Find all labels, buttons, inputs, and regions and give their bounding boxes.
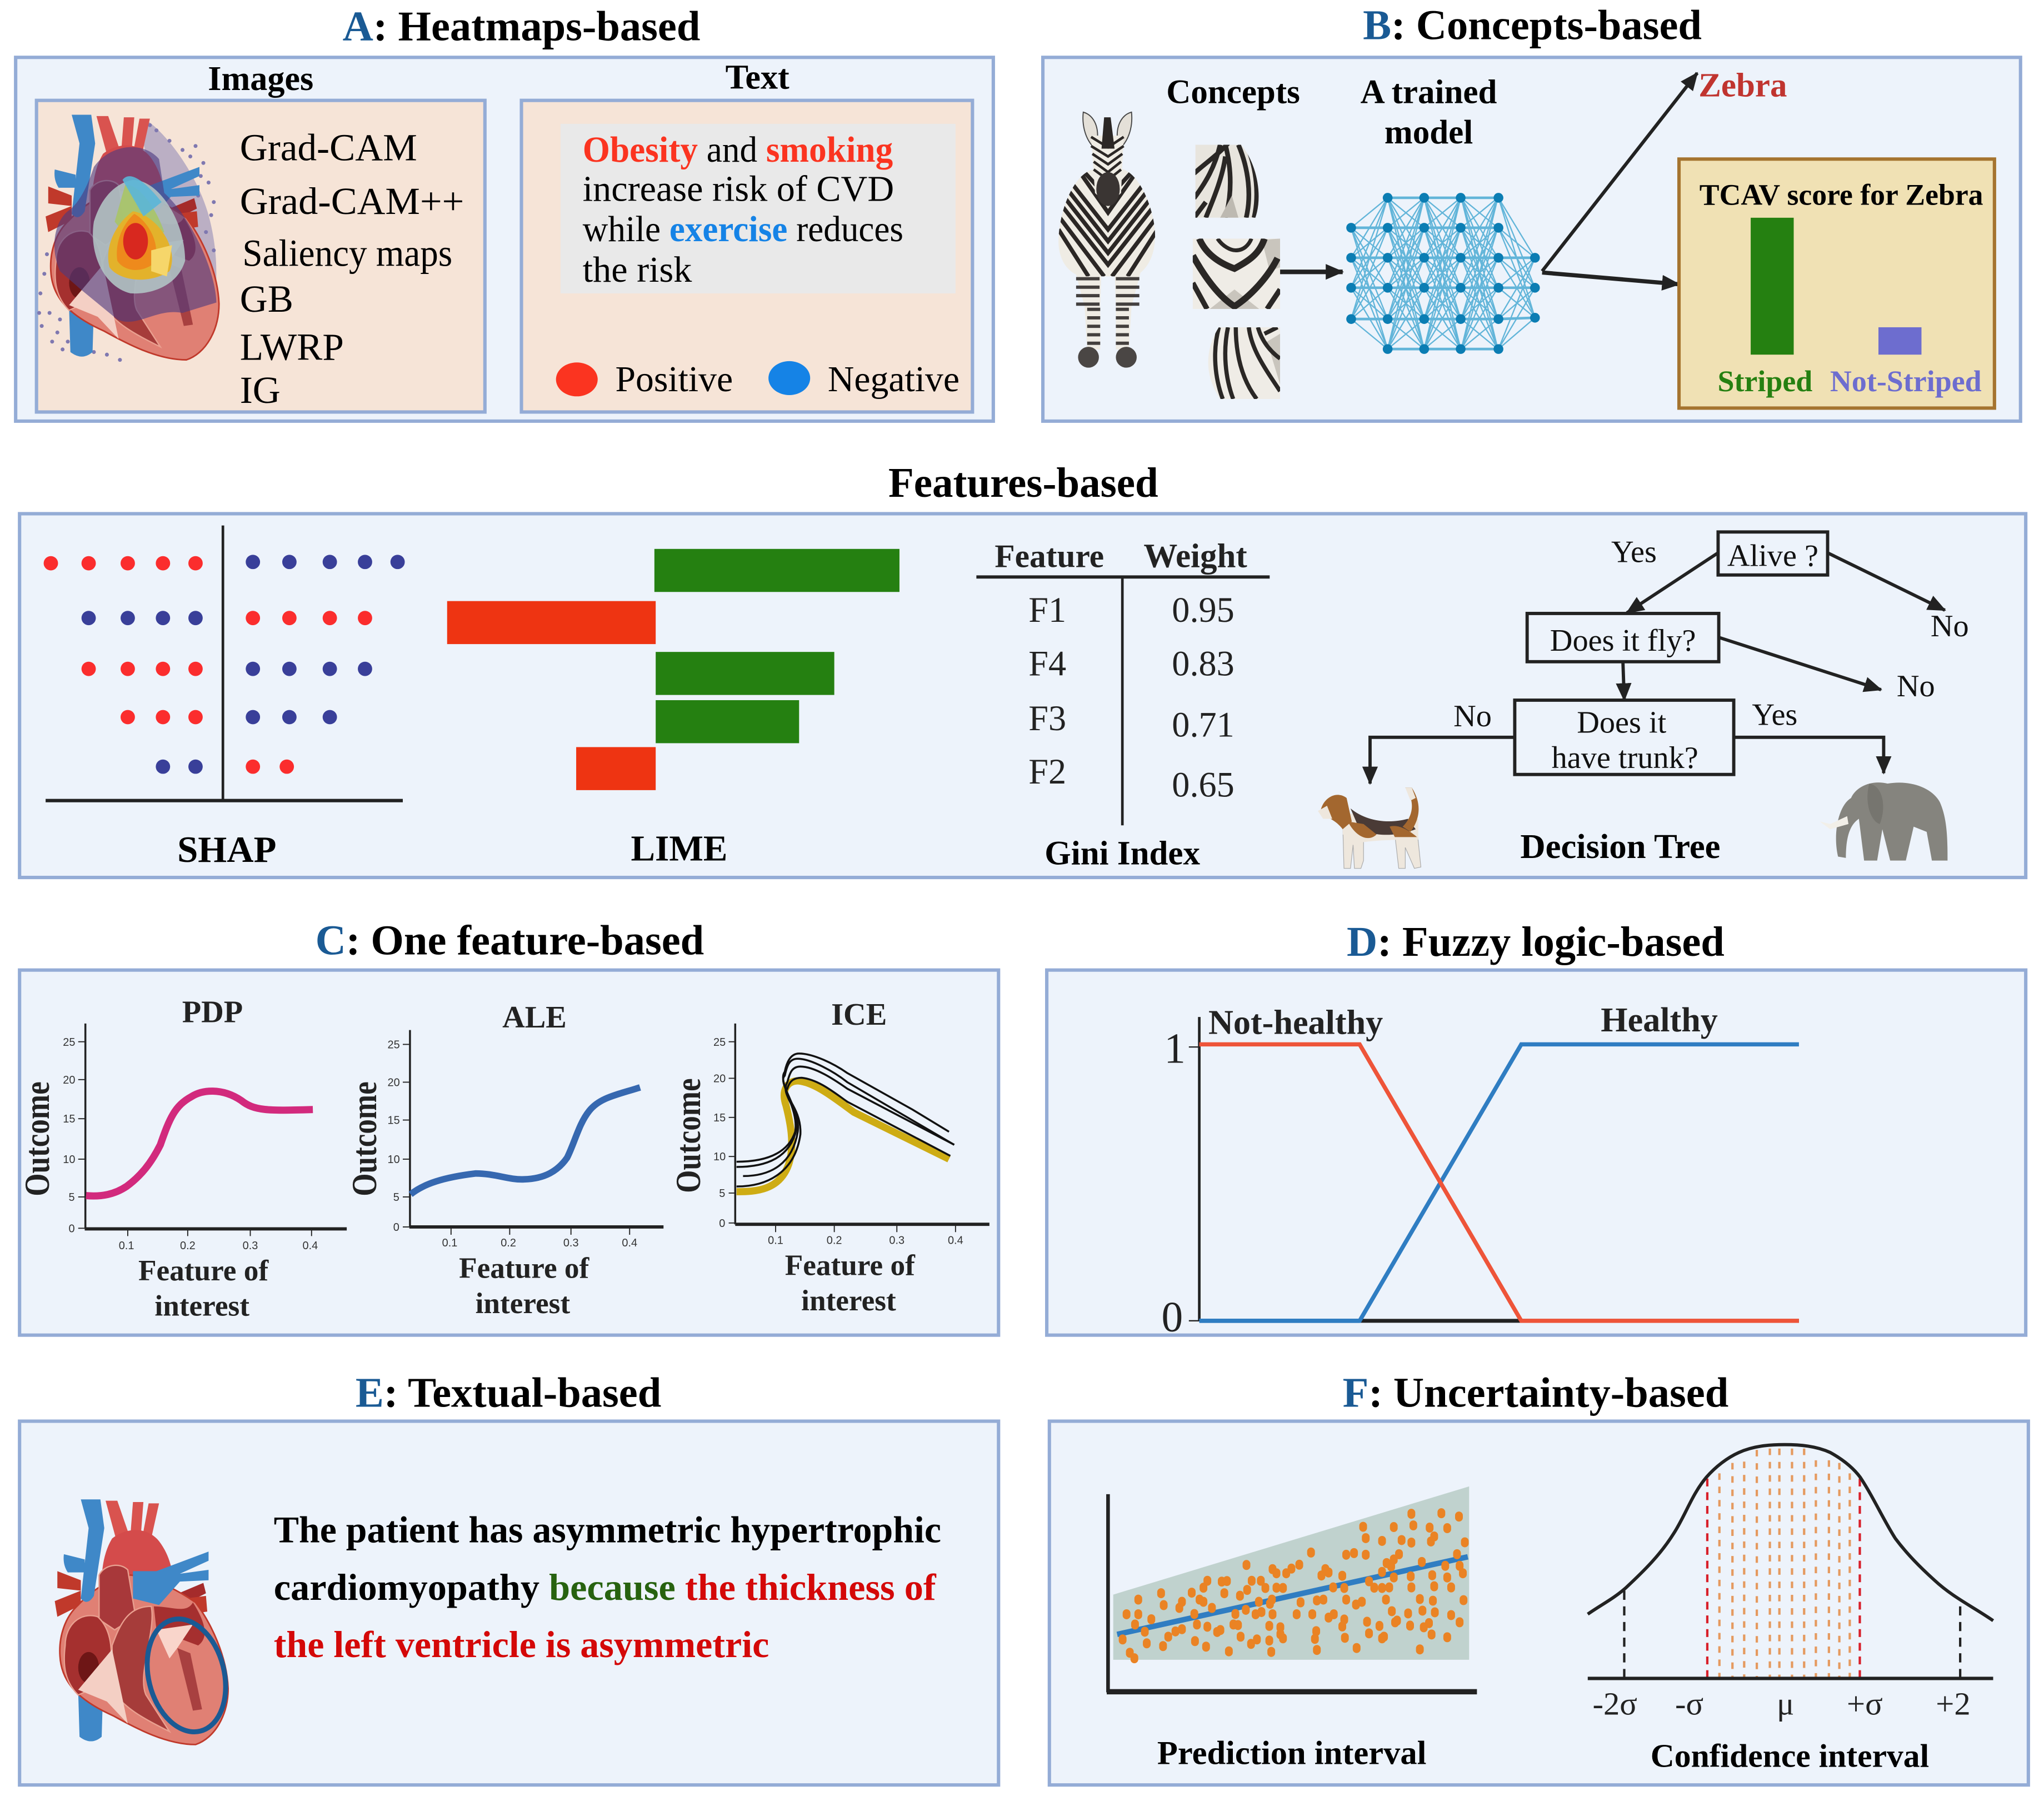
legend xyxy=(556,359,959,400)
chart: ALE: Feature of xyxy=(459,1251,590,1284)
node: Does it have trunk: have trunk? xyxy=(1552,741,1698,775)
highlighted text box: the risk xyxy=(583,250,692,290)
heading: Images: Images xyxy=(208,60,313,98)
panel: C one feature xyxy=(18,970,998,1335)
node: Alive: Alive ? xyxy=(1727,538,1818,573)
chart: ICE: ICE xyxy=(831,997,887,1032)
heading: Concepts: Concepts xyxy=(1166,73,1300,111)
method list: Saliency maps xyxy=(242,232,452,275)
confidence interval chart: +2 xyxy=(1936,1685,1971,1722)
chart: ALE: 15 xyxy=(387,1115,400,1127)
prediction interval chart xyxy=(1107,1486,1477,1772)
bar: Not-Striped xyxy=(1878,327,1921,355)
branch labels: No xyxy=(1897,669,1935,704)
TCAV score chart: TCAV score for Zebra xyxy=(1700,178,1983,211)
Gini index table: F1 xyxy=(1028,590,1066,630)
node: Does it fly: Does it fly? xyxy=(1550,623,1696,658)
chart: PDP xyxy=(18,995,347,1322)
fuzzy membership chart: Healthy xyxy=(1601,1001,1718,1039)
icon: heart heatmap xyxy=(39,114,219,360)
confidence interval chart: -2σ xyxy=(1592,1685,1637,1722)
title: E Textual-based: E: Textual-based xyxy=(356,1369,661,1416)
branch labels xyxy=(1453,535,1969,734)
legend: Positive xyxy=(615,359,733,400)
panel: F uncertainty xyxy=(1050,1421,2028,1785)
icon: heart with ring xyxy=(55,1499,237,1744)
label: SHAP: SHAP xyxy=(177,829,276,870)
chart: PDP: Outcome xyxy=(18,1081,57,1196)
Gini index table: 0.95 xyxy=(1172,590,1235,630)
Gini index table: F3 xyxy=(1028,699,1066,738)
arrow: model to Zebra xyxy=(1542,73,1697,271)
explanation text xyxy=(274,1509,941,1665)
chart: ALE: 0.1 xyxy=(442,1237,457,1249)
label: Striped: Striped xyxy=(1717,365,1812,398)
chart: PDP: 5 xyxy=(68,1191,75,1204)
chart: ALE: 0.4 xyxy=(622,1237,637,1249)
Gini index table: 0.65 xyxy=(1172,765,1235,805)
chart: ICE: 0.4 xyxy=(948,1234,963,1246)
title: D Fuzzy logic-based: D: Fuzzy logic-based xyxy=(1347,918,1725,965)
fuzzy membership chart xyxy=(1162,1001,1799,1341)
chart: ALE: 0.2 xyxy=(501,1237,516,1249)
label: Not-Striped: Not-Striped xyxy=(1830,365,1982,398)
LIME chart xyxy=(447,549,899,869)
chart: ICE: interest xyxy=(801,1284,896,1317)
chart: ICE: 10 xyxy=(713,1151,726,1163)
Gini index table: Feature xyxy=(994,538,1104,575)
branch labels: No xyxy=(1931,609,1969,643)
bar: Striped xyxy=(1751,218,1794,355)
panel: A heatmaps xyxy=(16,57,993,421)
method list: IG xyxy=(240,368,281,411)
title: C One feature-based: C: One feature-based xyxy=(316,917,704,964)
chart: PDP: 0.1 xyxy=(119,1240,134,1252)
chart: ICE: Feature of xyxy=(785,1249,916,1282)
arrows xyxy=(1370,553,1945,784)
title: B Concepts-based: B: Concepts-based xyxy=(1363,1,1702,48)
TCAV score chart xyxy=(1679,159,1995,408)
chart: ALE: 5 xyxy=(393,1191,399,1204)
fuzzy membership chart: 1 xyxy=(1164,1024,1186,1072)
branch labels: Yes xyxy=(1752,698,1797,732)
chart: ALE: 0 xyxy=(393,1221,399,1234)
chart: ICE: 20 xyxy=(713,1072,726,1085)
chart: ICE: 0.1 xyxy=(768,1234,783,1246)
method list: Grad-CAM++ xyxy=(240,179,464,222)
chart: ICE: 15 xyxy=(713,1112,726,1124)
subpanel: text xyxy=(522,101,972,412)
label: Prediction interval: Prediction interval xyxy=(1157,1735,1426,1772)
confidence interval chart xyxy=(1588,1445,1993,1774)
panel: features xyxy=(19,513,2026,877)
explanation text: The patient has asymmetric hypertrophic xyxy=(274,1509,941,1551)
legend: Negative xyxy=(828,359,959,400)
decision tree xyxy=(1318,532,1969,869)
chart: PDP: interest xyxy=(154,1289,249,1322)
label: Decision Tree: Decision Tree xyxy=(1520,827,1720,866)
branch labels: Yes xyxy=(1611,535,1657,569)
chart: ALE: interest xyxy=(476,1287,570,1320)
Gini index table: Weight xyxy=(1143,538,1247,575)
subpanel: images xyxy=(37,101,485,412)
chart: ALE: ALE xyxy=(502,1000,567,1035)
label: LIME: LIME xyxy=(631,829,727,869)
chart: PDP: PDP xyxy=(182,995,243,1030)
confidence interval chart: μ xyxy=(1777,1685,1794,1722)
highlighted text box: Obesity and smoking xyxy=(583,129,893,170)
chart: PDP: 10 xyxy=(63,1154,75,1166)
SHAP chart xyxy=(46,526,403,870)
icon: zebra xyxy=(1056,112,1160,368)
panel: E textual xyxy=(19,1421,998,1785)
icon: dog xyxy=(1318,787,1421,869)
arrow: model to TCAV xyxy=(1542,272,1679,285)
title: Features-based: Features-based xyxy=(888,459,1158,506)
heading: A trained model: model xyxy=(1385,114,1473,151)
node: Does it have trunk xyxy=(1515,700,1734,775)
node: Does it have trunk: Does it xyxy=(1577,706,1667,740)
chart: ALE: 0.3 xyxy=(563,1237,579,1249)
chart: PDP: 0.2 xyxy=(180,1240,196,1252)
heading: A trained model xyxy=(1361,73,1497,151)
chart: ICE: 5 xyxy=(719,1188,725,1200)
chart: ALE xyxy=(345,1000,663,1320)
heading: A trained model: A trained xyxy=(1361,73,1497,111)
chart: PDP: 0.4 xyxy=(303,1240,318,1252)
chart: PDP: Feature of xyxy=(138,1254,269,1287)
confidence interval chart: +σ xyxy=(1847,1685,1883,1722)
Gini index table xyxy=(976,538,1270,872)
heading: Text: Text xyxy=(726,59,789,97)
chart: ICE: 0.3 xyxy=(889,1234,904,1246)
chart: ALE: 20 xyxy=(387,1077,400,1089)
Gini index table: 0.83 xyxy=(1172,643,1235,683)
title: F Uncertainty-based: F: Uncertainty-based xyxy=(1343,1369,1728,1416)
chart: ICE xyxy=(669,997,989,1317)
chart: ALE: 25 xyxy=(387,1039,400,1051)
chart: ICE: Outcome xyxy=(669,1078,708,1193)
title: A Heatmaps-based: A: Heatmaps-based xyxy=(343,3,700,50)
chart: ALE: Outcome xyxy=(345,1081,384,1196)
chart: ALE: 10 xyxy=(387,1154,400,1166)
explanation text: the left ventricle is asymmetric xyxy=(274,1623,769,1665)
chart: ICE: 25 xyxy=(713,1036,726,1049)
method list: Grad-CAM xyxy=(240,126,417,169)
explanation text: cardiomyopathy because the thickness of xyxy=(274,1566,937,1608)
panel: D fuzzy logic xyxy=(1047,970,2026,1341)
highlighted text box: increase risk of CVD xyxy=(583,168,894,209)
icon: elephant xyxy=(1820,782,1947,861)
label: Gini Index: Gini Index xyxy=(1045,835,1201,872)
label: Confidence interval: Confidence interval xyxy=(1651,1737,1929,1774)
chart: PDP: 0 xyxy=(68,1223,75,1235)
chart: ICE: 0 xyxy=(719,1218,725,1230)
panel: B concepts xyxy=(1043,57,2021,421)
node: Does it fly xyxy=(1527,613,1719,662)
neural network xyxy=(1351,198,1535,349)
Gini index table: F2 xyxy=(1028,752,1066,791)
chart: PDP: 15 xyxy=(63,1113,75,1125)
branch labels: No xyxy=(1453,699,1492,734)
method list xyxy=(240,126,464,411)
node: Alive xyxy=(1718,532,1828,575)
confidence interval chart: -σ xyxy=(1675,1685,1703,1722)
fuzzy membership chart: Not-healthy xyxy=(1208,1004,1383,1042)
chart: PDP: 0.3 xyxy=(243,1240,258,1252)
method list: LWRP xyxy=(240,326,344,368)
Gini index table: 0.71 xyxy=(1172,705,1235,745)
highlighted text box xyxy=(561,124,956,293)
chart: PDP: 25 xyxy=(63,1036,75,1049)
concept patches xyxy=(1193,143,1281,399)
Gini index table: F4 xyxy=(1028,643,1066,683)
arrow: concepts to model xyxy=(1280,271,1343,273)
highlighted text box: while exercise reduces xyxy=(583,209,903,250)
chart: PDP: 20 xyxy=(63,1074,75,1086)
method list: GB xyxy=(240,277,293,320)
chart: ICE: 0.2 xyxy=(827,1234,842,1246)
fuzzy membership chart: 0 xyxy=(1162,1293,1183,1341)
label: Zebra: Zebra xyxy=(1698,67,1787,104)
